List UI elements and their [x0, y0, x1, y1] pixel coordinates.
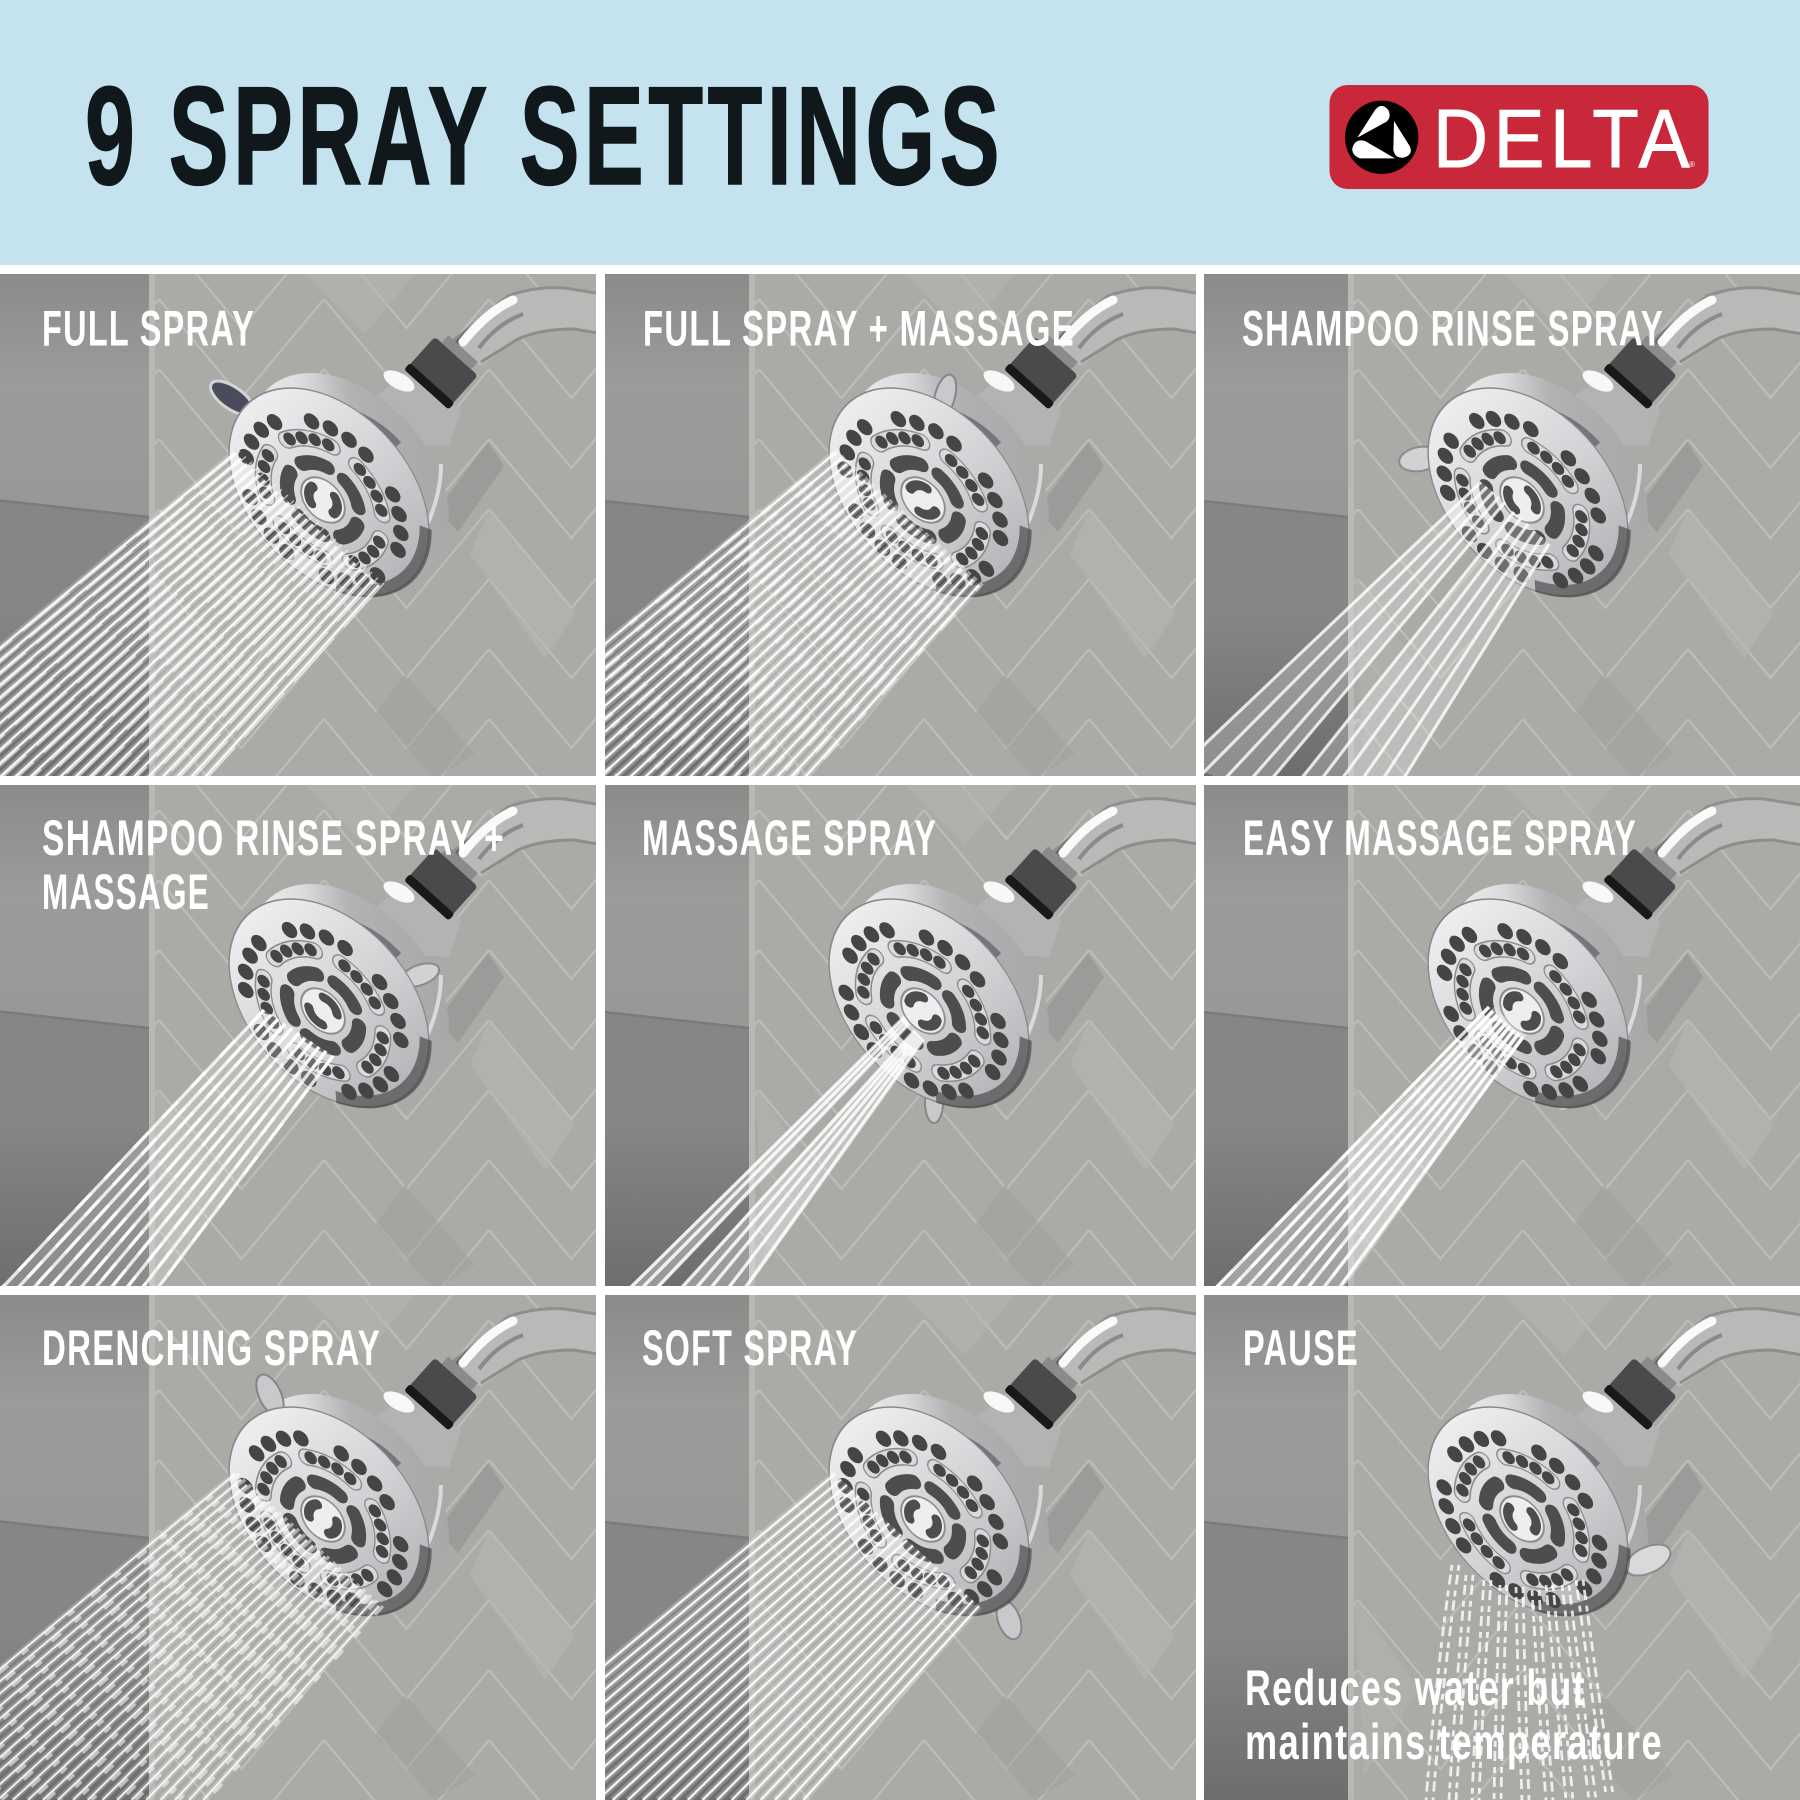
water	[1184, 482, 1549, 794]
panel: full spray	[0, 274, 596, 776]
logo: Delta	[1330, 85, 1708, 189]
lever	[925, 1083, 943, 1123]
water	[0, 1010, 333, 1305]
lever	[1621, 1538, 1675, 1582]
water	[442, 1474, 979, 1800]
logo: Delta: DELTA	[1433, 92, 1695, 185]
panel: soft spray	[605, 1295, 1196, 1800]
panel: shampoo rinse spray + massage	[0, 785, 596, 1286]
panel: massage spray	[605, 785, 1196, 1286]
lever	[1556, 1092, 1570, 1110]
panel: full spray + massage	[605, 274, 1196, 776]
panel: easy massage spray	[1204, 785, 1800, 1286]
title: 9 SPRAY SETTINGS	[85, 57, 1004, 214]
water	[0, 451, 384, 779]
lever	[251, 1370, 289, 1420]
label: SOFT SPRAY	[642, 1320, 858, 1376]
water	[442, 451, 982, 779]
panel: pause	[1204, 1295, 1800, 1800]
label: MASSAGE SPRAY	[642, 810, 937, 866]
water	[1209, 1007, 1526, 1295]
water	[623, 1015, 925, 1295]
logo: Delta: ®	[1689, 160, 1695, 169]
label line 2: MASSAGE	[42, 864, 210, 920]
label: DRENCHING SPRAY	[42, 1320, 381, 1376]
label: PAUSE	[1243, 1320, 1359, 1376]
header band	[0, 0, 1800, 265]
label: FULL SPRAY	[42, 300, 255, 356]
lever	[992, 1597, 1026, 1643]
water drips	[1426, 1565, 1613, 1800]
lever	[1397, 444, 1443, 474]
panel: drenching spray	[0, 1295, 596, 1800]
water	[0, 1474, 383, 1800]
panel: shampoo rinse spray	[1204, 274, 1800, 776]
lever	[398, 959, 442, 991]
description: Reduces water but	[1245, 1660, 1586, 1716]
lever	[205, 375, 259, 421]
lever	[930, 372, 960, 420]
